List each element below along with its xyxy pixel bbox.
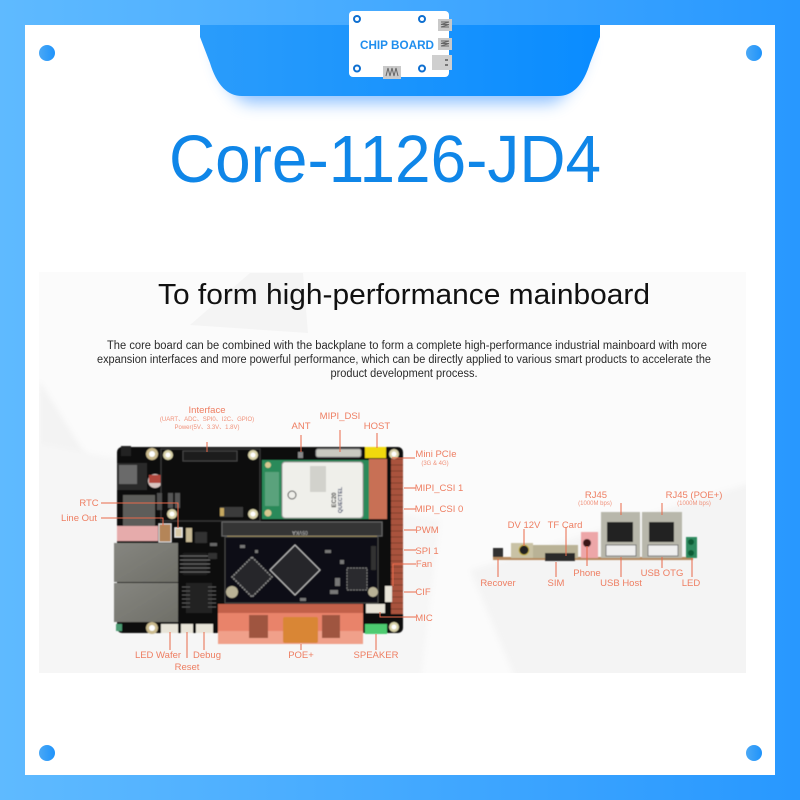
- main board callout lines: [101, 430, 416, 658]
- main board labels: LED Wafer: [135, 650, 181, 661]
- main board labels: POE+: [288, 650, 314, 661]
- main board labels: MIPI_DSI: [320, 411, 360, 422]
- description: expansion interfaces and more powerful performance, which can be directly applied to various smart products to accelerate the: [97, 354, 711, 366]
- side view labels: DV 12V: [508, 520, 541, 531]
- title: Core-1126-JD4: [169, 122, 601, 197]
- main board labels: PWM: [415, 525, 439, 536]
- main board labels: ANT: [292, 421, 311, 432]
- main board diagram: 05VKA: [292, 529, 308, 535]
- ethernet small top / phone jack: [123, 495, 155, 526]
- host connector: [365, 447, 386, 458]
- so-dimm socket: [222, 522, 382, 536]
- main board labels: MIPI_CSI 1: [415, 483, 463, 494]
- heading: To form high-performance mainboard: [158, 279, 650, 311]
- main board labels: Fan: [416, 559, 432, 570]
- ec20 module: [262, 460, 369, 519]
- lan chips: [183, 553, 207, 575]
- main board labels: Power(5V、3.3V、1.8V): [174, 425, 240, 431]
- board pcb: [117, 447, 403, 633]
- speaker connector: [365, 624, 387, 634]
- content panel background: [20, 272, 760, 690]
- main board labels: CIF: [415, 587, 431, 598]
- core board: [225, 537, 378, 603]
- side view labels: (1000M bps): [677, 501, 711, 507]
- main board labels: (UART、ADC、SPI0、I2C、GPIO): [160, 417, 254, 423]
- main board labels: Line Out: [61, 513, 97, 524]
- main board labels: Mini PCIe: [415, 449, 457, 460]
- description: [97, 340, 711, 380]
- main board labels: Interface: [189, 405, 225, 416]
- side view labels: Recover: [480, 578, 516, 589]
- side view labels: USB Host: [600, 578, 642, 589]
- logo: chip board: CHIP BOARD: [360, 38, 434, 52]
- side view board: [493, 512, 697, 561]
- dsi connector: [316, 449, 361, 457]
- main board labels: Debug: [193, 650, 221, 661]
- header tab: [200, 25, 600, 103]
- description: product development process.: [330, 368, 478, 380]
- main board diagram: [114, 446, 403, 644]
- main board labels: [61, 405, 463, 673]
- top-left connectors: [121, 446, 131, 456]
- side view labels: RJ45 (POE+): [666, 490, 722, 501]
- main board labels: MIC: [415, 613, 433, 624]
- main board diagram: EC20: [332, 492, 338, 508]
- poe overlay: [218, 604, 363, 644]
- side view labels: TF Card: [548, 520, 582, 531]
- main board diagram: QUECTEL: [338, 486, 344, 513]
- side view labels: RJ45: [585, 490, 607, 501]
- side view labels: Phone: [573, 568, 601, 579]
- main board labels: MIPI_CSI 0: [415, 504, 463, 515]
- main board labels: RTC: [79, 498, 99, 509]
- description: The core board can be combined with the backplane to form a complete high-performance industrial mainboard with more: [107, 340, 707, 352]
- side view labels: [480, 490, 722, 589]
- fan, mic connectors: [385, 586, 392, 602]
- main board labels: (3G & 4G): [421, 461, 449, 467]
- side view labels: SIM: [548, 578, 565, 589]
- rj45 left: [114, 543, 178, 582]
- side view labels: LED: [682, 578, 700, 589]
- main board labels: SPEAKER: [354, 650, 399, 661]
- main board labels: SPI 1: [415, 546, 439, 557]
- mini pcie connector overlay: [369, 459, 387, 519]
- logo: chip board: [349, 11, 452, 79]
- side view labels: (1000M bps): [578, 501, 612, 507]
- header column: [391, 459, 403, 614]
- upper shield panel: [161, 449, 260, 521]
- bottom-left connectors: [161, 624, 178, 633]
- main board labels: HOST: [364, 421, 390, 432]
- main board labels: Reset: [175, 662, 200, 673]
- side view labels: USB OTG: [641, 568, 683, 579]
- side view callout lines: [498, 503, 692, 577]
